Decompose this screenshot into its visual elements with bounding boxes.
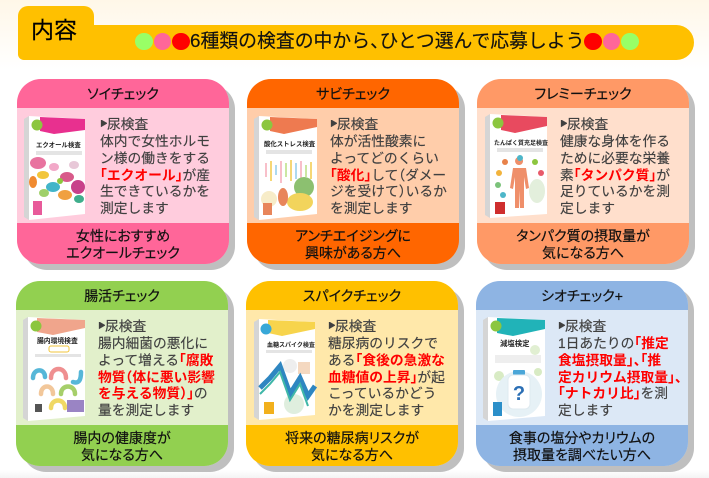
product box: たんぱく質充足検査: たんぱく質充足検査 <box>494 139 548 147</box>
panel: フレミーチェック <box>477 79 695 270</box>
panel heading: スパイクチェック <box>303 288 401 304</box>
title: 内容 <box>31 17 77 43</box>
body text <box>330 117 447 216</box>
panel footer: 気になる方へ <box>542 245 624 261</box>
panel heading: シオチェック+ <box>541 288 623 304</box>
body text: 体内で女性ホルモ <box>100 134 210 149</box>
body text: 定します <box>560 201 615 216</box>
panel footer: エクオールチェック <box>66 245 180 261</box>
body text: 体が活性酸素に <box>330 134 426 149</box>
panel footer: 気になる方へ <box>311 447 393 463</box>
body text: 腸内細菌の悪化に <box>98 336 208 351</box>
panel footer: タンパク質の摂取量が <box>516 228 650 244</box>
body text: 物質（体に悪い影響 <box>98 370 215 384</box>
panel footer <box>477 223 689 264</box>
panel heading: サビチェック <box>316 86 390 102</box>
body text: 尿検査 <box>565 319 606 334</box>
product box: 血糖スパイク検査 <box>254 319 317 420</box>
panel: サビチェック <box>247 79 465 270</box>
body text: ジを受けて）いるか <box>330 184 447 199</box>
decorative dots right <box>584 33 639 50</box>
product box: 酸化ストレス検査 <box>254 116 317 220</box>
body text: よって増える「腐敗 <box>98 353 213 368</box>
panel heading <box>247 79 459 108</box>
body text <box>558 319 682 418</box>
body text: 1日あたりの「推定 <box>558 336 669 351</box>
panel: ソイチェック <box>17 79 235 270</box>
panel footer: 将来の糖尿病リスクが <box>285 430 419 446</box>
product box: 減塩検定 <box>483 317 545 421</box>
panel heading <box>16 281 228 310</box>
section heading band <box>18 6 694 60</box>
panel heading: フレミーチェック <box>534 86 632 102</box>
body text: よってどのくらい <box>330 151 439 166</box>
body text: 健康な身体を作る <box>560 134 670 149</box>
panel footer <box>16 425 228 466</box>
panel footer <box>476 425 688 466</box>
body text: 測定します <box>100 201 169 216</box>
decorative dots left <box>135 33 190 50</box>
body text: 血糖値の上昇」が起 <box>328 370 445 384</box>
body text: 尿検査 <box>105 319 146 334</box>
body text <box>328 319 445 418</box>
product box: エクオール検査: エクオール検査 <box>36 140 81 149</box>
product box: 腸内環境検査: 腸内環境検査 <box>37 336 78 345</box>
body text: ために必要な栄養 <box>560 151 670 166</box>
panel heading <box>17 79 229 108</box>
body text: かを測定します <box>328 403 424 418</box>
panel footer: 女性におすすめ <box>76 228 170 244</box>
panel: 腸活チェック <box>16 281 234 472</box>
product box: 腸内環境検査 <box>23 317 85 421</box>
body text: 足りているかを測 <box>560 184 670 199</box>
panel footer: 気になる方へ <box>81 447 163 463</box>
body text: 食塩摂取量」、「推 <box>558 353 661 368</box>
body text: 「酸化」して（ダメー <box>330 168 446 182</box>
heading bar <box>18 25 694 60</box>
panel: スパイクチェック <box>246 281 464 472</box>
panel footer <box>246 425 458 466</box>
body text <box>560 117 670 216</box>
lead text: 6種類の検査の中から、ひとつ選んで応募しよう <box>190 30 585 51</box>
heading tab <box>18 6 94 46</box>
body text: ン様の働きをする <box>100 151 210 166</box>
panel footer: 摂取量を調べたい方へ <box>513 447 651 463</box>
panel footer: アンチエイジングに <box>295 228 411 244</box>
body text: を測定します <box>330 201 413 216</box>
body text: 量を測定します <box>98 403 194 418</box>
product box: たんぱく質充足検査 <box>485 114 548 218</box>
body text: こっているかどう <box>328 386 436 401</box>
body text: 生できているかを <box>100 184 210 199</box>
product box: 血糖スパイク検査: 血糖スパイク検査 <box>267 341 315 349</box>
body text: ある「食後の急激な <box>328 353 445 368</box>
body text: 「エクオール」が産 <box>100 168 210 182</box>
body text: 定カリウム摂取量」、 <box>558 370 682 384</box>
panel footer: 腸内の健康度が <box>73 430 171 446</box>
panel footer: 興味がある方へ <box>305 245 401 261</box>
body text: 定します <box>558 403 613 418</box>
body text: 素「タンパク質」が <box>560 168 670 182</box>
product box: 減塩検定: 減塩検定 <box>500 339 530 348</box>
panel heading: ソイチェック <box>87 86 159 102</box>
panel heading <box>246 281 458 310</box>
panel heading <box>476 281 688 310</box>
body text <box>98 319 215 418</box>
body text: を与える物質）」の <box>98 386 208 401</box>
body text: 「ナトカリ比」を測 <box>558 386 668 401</box>
panel footer <box>17 223 229 264</box>
panel heading <box>477 79 689 108</box>
body text: 糖尿病のリスクで <box>328 336 438 351</box>
product box: 酸化ストレス検査: 酸化ストレス検査 <box>264 139 316 148</box>
body text: 尿検査 <box>567 117 608 132</box>
panel heading: 腸活チェック <box>84 288 160 304</box>
panel footer <box>247 223 459 264</box>
body text <box>100 117 210 216</box>
product box: エクオール検査 <box>24 116 85 220</box>
body text: 尿検査 <box>107 117 148 132</box>
panel footer: 食事の塩分やカリウムの <box>509 430 655 446</box>
body text: 尿検査 <box>335 319 376 334</box>
product box: 減塩検定: ? <box>513 383 525 405</box>
panel: シオチェック＋ <box>476 281 694 472</box>
body text: 尿検査 <box>337 117 378 132</box>
